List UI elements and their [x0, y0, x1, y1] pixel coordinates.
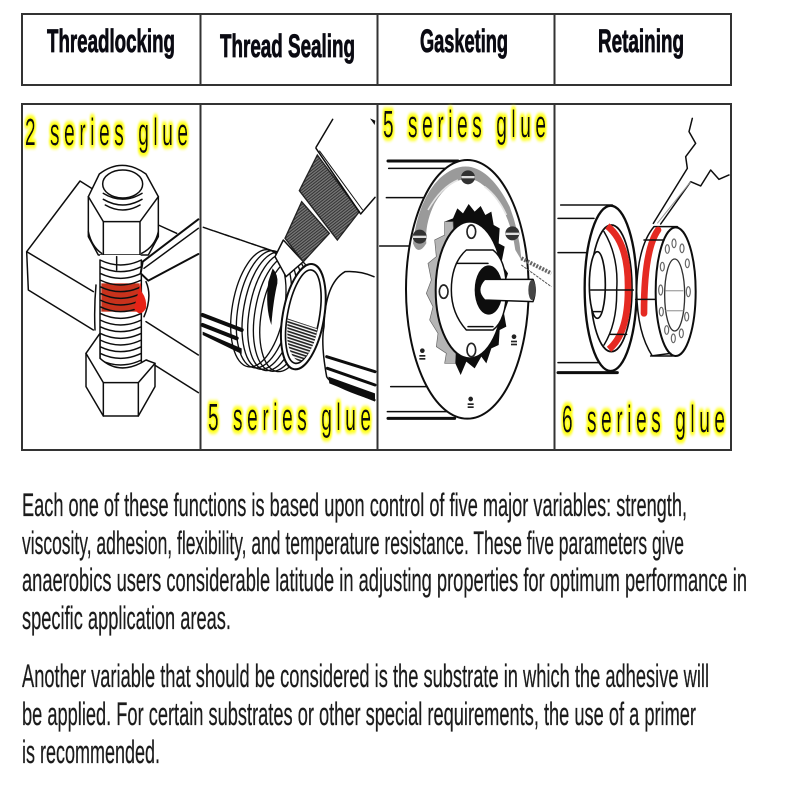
heading: Retaining: Retaining: [598, 23, 684, 59]
lower nut: [86, 333, 155, 416]
fitting threads: [222, 245, 322, 376]
shaft: [480, 279, 535, 302]
glue drip: [134, 282, 146, 313]
sprocket: [426, 204, 509, 375]
heading: Gasketing: Gasketing: [420, 23, 508, 59]
paragraph: substrate and primer: is recommended.: [22, 734, 160, 770]
header table: [22, 14, 731, 85]
heading: Thread Sealing: Thread Sealing: [220, 28, 355, 64]
hub: [451, 250, 506, 330]
paragraph: substrate and primer: [22, 658, 709, 770]
red bead: [644, 230, 658, 313]
red ring: [607, 226, 628, 349]
applicator needle: [141, 219, 198, 281]
small fasteners: [419, 334, 517, 408]
nut: [88, 165, 158, 255]
label: 2 series glue: 2 series glue: [25, 112, 188, 154]
glue streak: [267, 268, 277, 325]
applicator: [653, 118, 729, 224]
paragraph: five major variables: specific application areas.: [22, 600, 231, 636]
heading: Threadlocking: Threadlocking: [47, 23, 175, 59]
label: 5 series glue (gasketing): 5 series glue: [383, 104, 546, 146]
illustration: gasketing flange: [380, 160, 551, 419]
illustration: thread sealing pipe: [203, 118, 375, 402]
roller: [637, 227, 694, 356]
second pipe: [323, 272, 375, 400]
illustration: retaining bearing: [558, 118, 729, 373]
illustration: threadlocking bolt: [27, 165, 198, 416]
gasket bead: [413, 166, 521, 260]
paragraph: five major variables: [22, 487, 747, 636]
tube nozzle: [275, 240, 303, 277]
label: 5 series glue (thread sealing): 5 series glue: [208, 397, 371, 439]
bearing outer: [585, 206, 637, 371]
screws: [461, 170, 475, 184]
thread shaft: [100, 255, 141, 370]
dispenser: [521, 258, 551, 273]
bolt holes: [467, 225, 476, 238]
race bolt holes: [659, 239, 690, 343]
label: 6 series glue: 6 series glue: [562, 399, 725, 441]
illustration table frame: [22, 104, 731, 450]
